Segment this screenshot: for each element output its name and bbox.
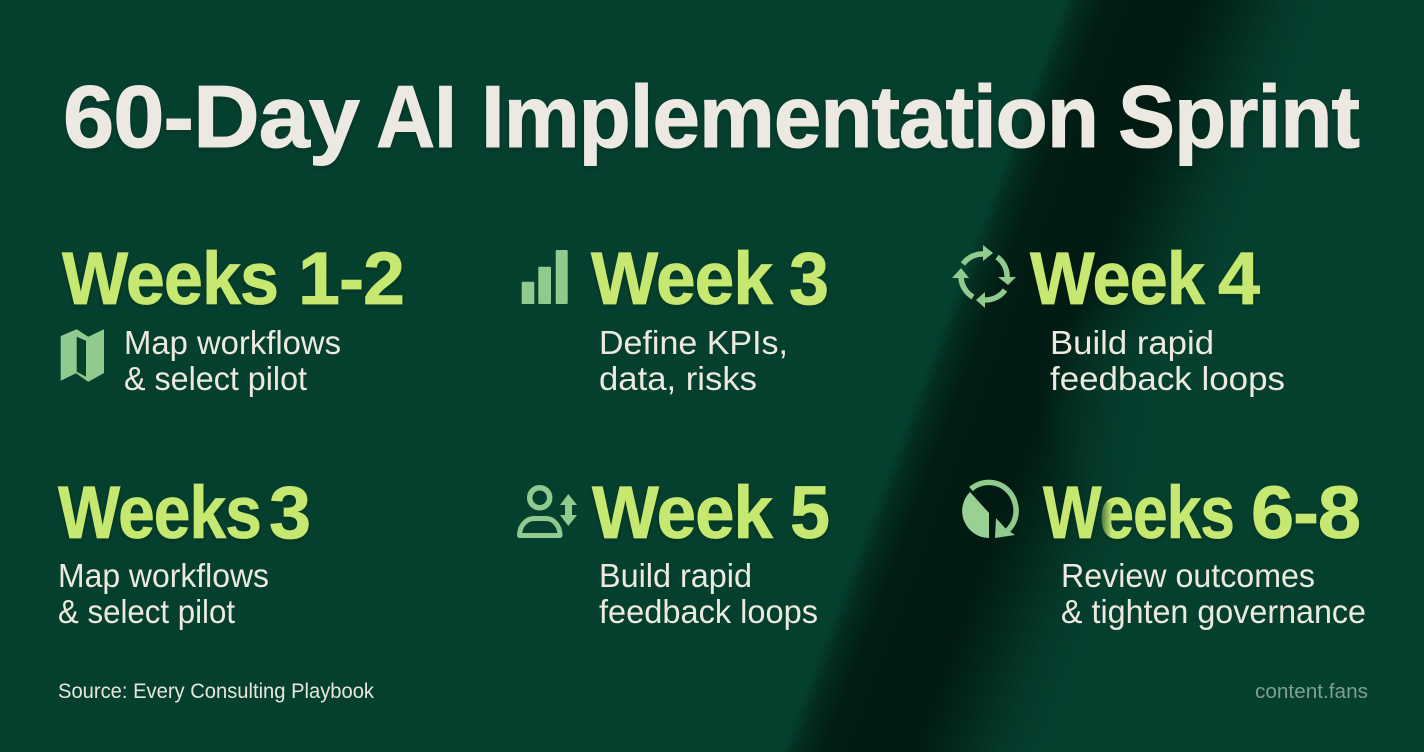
shading on first e: [1098, 502, 1112, 539]
panel: weeks 3 bottom: [58, 471, 310, 630]
description: map workflows: Map workflows: [124, 324, 341, 361]
heading: week 5: Week: [592, 471, 774, 554]
heading: weeks 1-2: Weeks: [62, 237, 278, 320]
title: Implementation: [481, 67, 1098, 166]
heading: weeks 1-2: 1-2: [298, 237, 404, 320]
heading: weeks 6-8: Weeks: [1043, 471, 1234, 554]
description: build rapid: feedback loops: [599, 593, 818, 630]
icon: bar chart: [522, 250, 568, 304]
description: map workflows: Map workflows: [58, 557, 269, 594]
description: map workflows: & select pilot: [58, 593, 235, 630]
heading: weeks 3: 3: [269, 471, 310, 554]
watermark: content.fans: [1255, 680, 1368, 703]
description: review outcomes: Review outcomes: [1061, 557, 1315, 594]
title: Sprint: [1118, 67, 1360, 166]
icon: map: [61, 329, 104, 382]
source note: Source: Every Consulting Playbook: [58, 680, 374, 703]
panel: weeks 1-2: [61, 237, 404, 397]
heading: week 4: 4: [1218, 237, 1260, 320]
heading: week 5: 5: [790, 471, 829, 554]
title: AI: [376, 67, 456, 166]
heading: week 3: 3: [789, 237, 828, 320]
icon: person with arrows: [520, 488, 577, 536]
heading: weeks 6-8: 6-8: [1251, 471, 1360, 554]
heading: weeks 3: Weeks: [58, 471, 261, 554]
description: build rapid: Build rapid: [599, 557, 752, 594]
description: build rapid: Build rapid: [1050, 324, 1214, 361]
heading: week 4: Week: [1030, 237, 1206, 320]
panel: week 5: [520, 471, 829, 630]
panel: week 4: [952, 237, 1285, 397]
description: build rapid: feedback loops: [1050, 360, 1285, 397]
icon: cycle arrows: [952, 245, 1016, 308]
description: define KPIs: Define KPIs,: [599, 324, 788, 361]
panel: week 3 top: [522, 237, 828, 397]
panel: weeks 6-8: [962, 471, 1366, 630]
description: review outcomes: & tighten governance: [1061, 593, 1366, 630]
description: map workflows: & select pilot: [124, 360, 307, 397]
heading: week 3: Week: [591, 237, 774, 320]
icon: review cycle: [962, 482, 1016, 538]
description: define KPIs: data, risks: [599, 360, 757, 397]
title: 60-Day: [63, 67, 360, 166]
